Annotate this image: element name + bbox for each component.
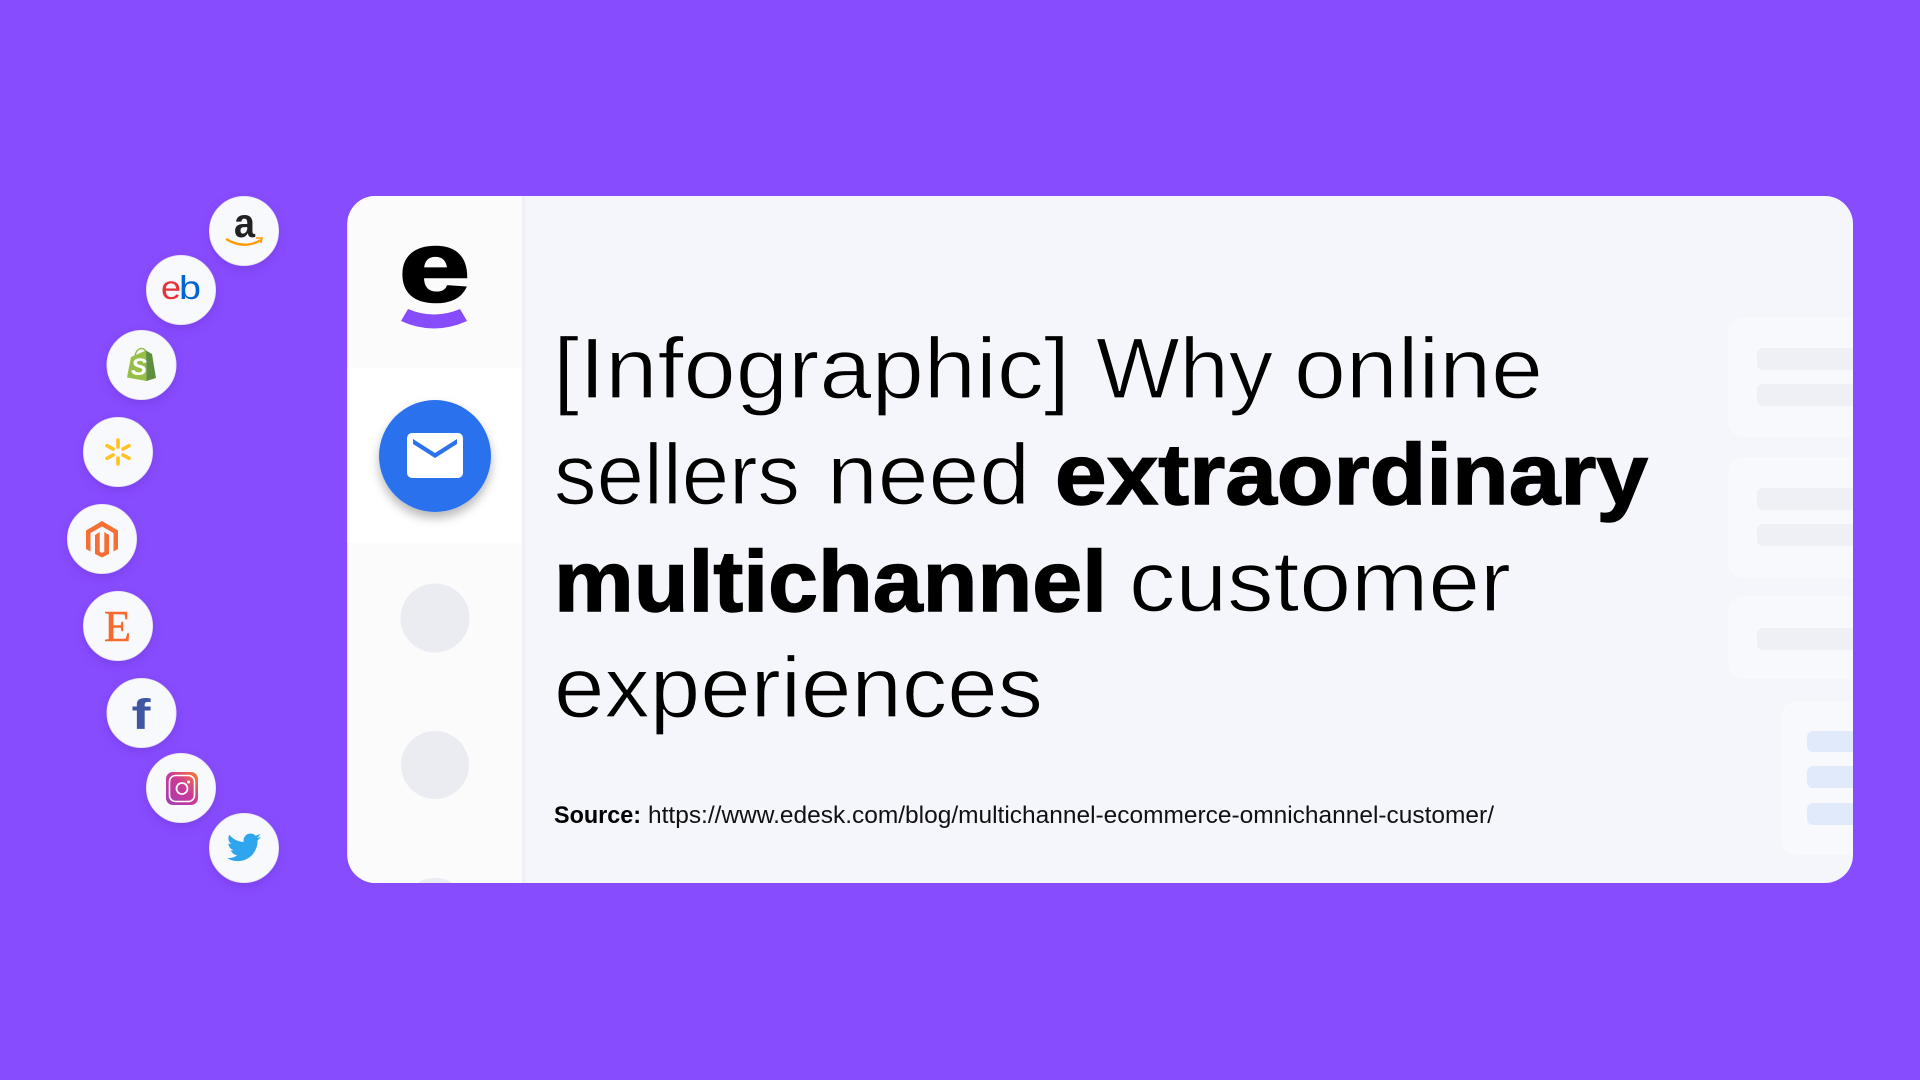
card 3 xyxy=(1728,596,1888,679)
icon: ebay: e xyxy=(161,269,181,306)
icon: ebay: b xyxy=(179,269,201,306)
icon: twitter xyxy=(209,813,279,883)
card 2 xyxy=(1728,457,1888,578)
card 1 xyxy=(1728,317,1888,437)
heading word: need: need xyxy=(827,427,1030,523)
heading word: online: online xyxy=(1294,321,1543,417)
card 4 blue xyxy=(1807,731,1853,825)
icon: shopify: S xyxy=(131,354,147,381)
heading line 3 bold: multichannel xyxy=(554,534,1107,630)
logo xyxy=(401,246,468,328)
icon: amazon: a xyxy=(234,200,256,246)
icon: instagram xyxy=(146,753,216,823)
panel: faded message list xyxy=(1807,731,1853,825)
heading line 4: experiences xyxy=(554,640,1043,736)
placeholder circle 3 xyxy=(418,878,452,883)
sidebar edge xyxy=(522,196,525,883)
heading xyxy=(553,321,1648,736)
button circle xyxy=(379,400,491,512)
icon: facebook: f xyxy=(132,691,151,739)
source url: https://www.edesk.com/blog/multichannel-ecommerce-omnichannel-customer/ xyxy=(648,802,1494,829)
icon: walmart xyxy=(83,417,153,487)
icon: amazon xyxy=(209,196,279,266)
logo letter: e xyxy=(399,211,470,323)
envelope xyxy=(407,433,463,478)
panel background xyxy=(347,196,1853,883)
icon: ebay xyxy=(146,255,216,325)
icon: facebook xyxy=(107,678,176,748)
icon: etsy: E xyxy=(104,602,131,651)
heading line 2 bold: extraordinary xyxy=(1055,427,1648,523)
icons: sales channels xyxy=(67,196,279,883)
icon: email button xyxy=(379,400,491,512)
panel: sidebar xyxy=(347,196,525,946)
heading word: sellers: sellers xyxy=(554,427,800,523)
logo smile xyxy=(401,309,467,328)
icon: etsy xyxy=(83,591,153,661)
heading word: Why: Why xyxy=(1096,321,1273,417)
active row xyxy=(347,368,348,543)
heading line 3 regular: customer xyxy=(1129,534,1511,630)
icon: magento xyxy=(67,504,137,574)
source line xyxy=(554,806,1494,828)
heading word: [Infographic]: [Infographic] xyxy=(553,321,1070,417)
placeholder circle 1 xyxy=(400,584,470,652)
source label: Source: xyxy=(554,802,641,829)
icon: shopify xyxy=(107,330,176,400)
panel: main card xyxy=(347,196,1853,883)
sidebar background xyxy=(347,196,375,883)
placeholder circle 2 xyxy=(401,731,469,799)
